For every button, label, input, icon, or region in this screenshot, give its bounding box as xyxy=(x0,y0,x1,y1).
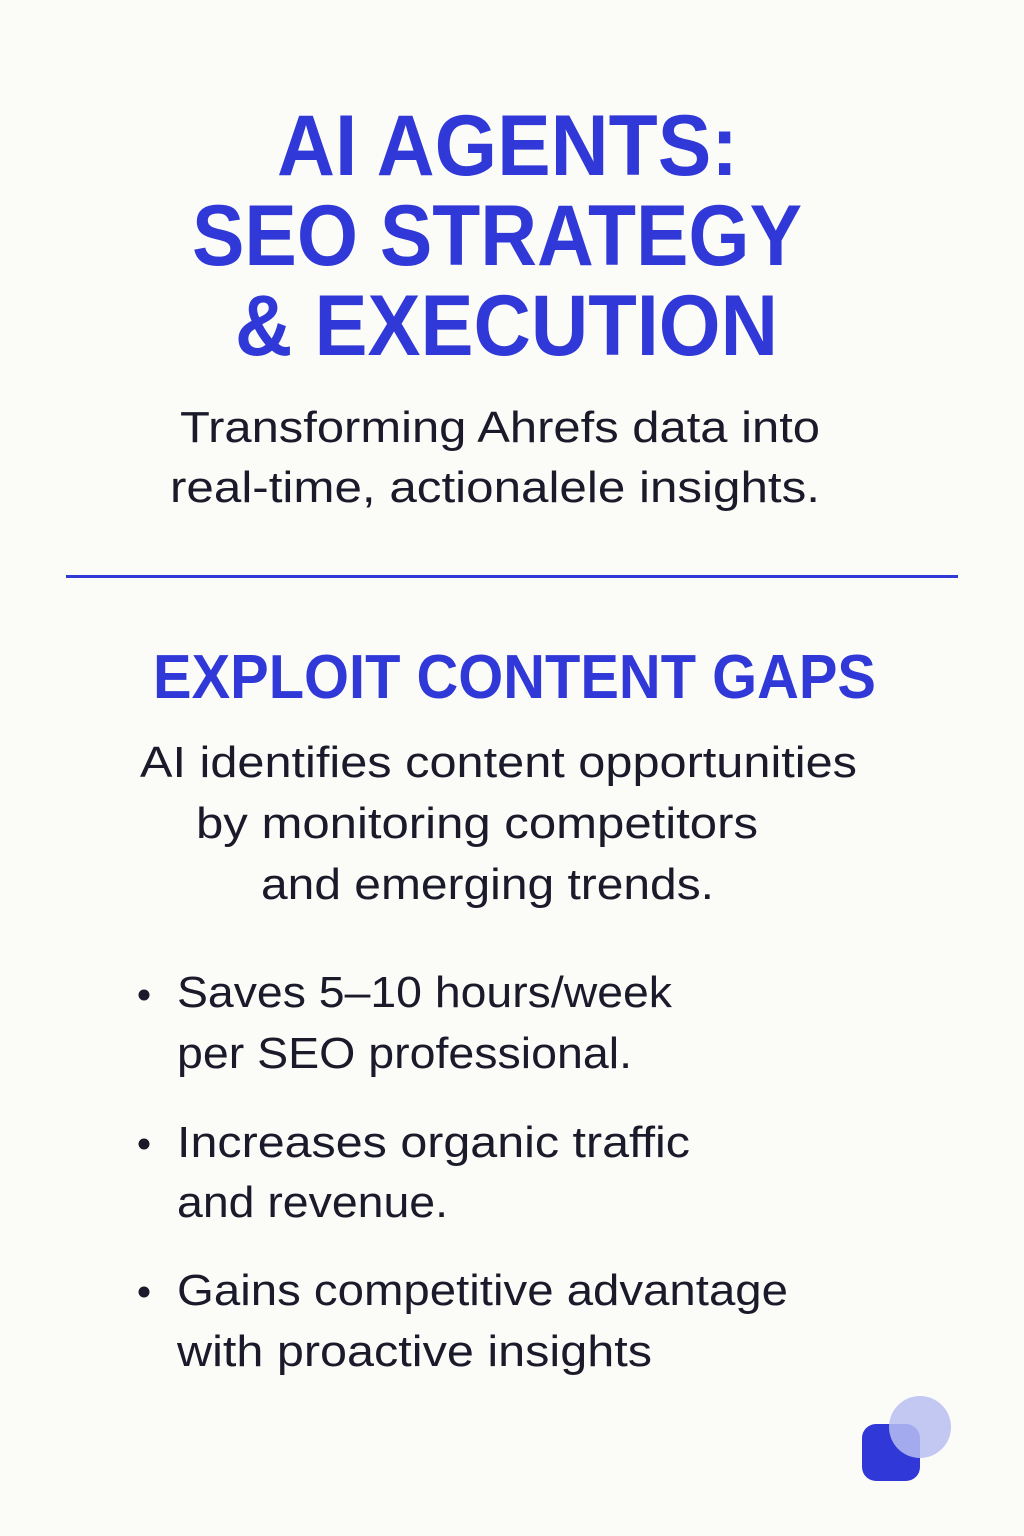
title xyxy=(192,98,802,374)
title: & EXECUTION xyxy=(235,278,778,374)
bullet list xyxy=(138,968,788,1376)
icon: logo xyxy=(862,1396,951,1481)
bullet 3 xyxy=(138,1266,788,1376)
subtitle: real-time, actionalele insights. xyxy=(170,463,820,512)
subtitle xyxy=(170,403,820,512)
subtitle: Transforming Ahrefs data into xyxy=(180,403,820,452)
bullet 1 xyxy=(138,968,673,1078)
title: AI AGENTS: xyxy=(277,98,738,194)
body paragraph: by monitoring competitors xyxy=(196,799,758,848)
title: SEO STRATEGY xyxy=(192,188,802,284)
body paragraph xyxy=(140,738,857,909)
bullet 2: Increases organic traffic xyxy=(177,1118,690,1167)
bullet 3: with proactive insights xyxy=(176,1327,652,1376)
bullet 2 xyxy=(138,1118,690,1227)
bullet 1: per SEO professional. xyxy=(177,1029,632,1078)
bullet 1: Saves 5–10 hours/week xyxy=(177,968,673,1017)
bullet 2: and revenue. xyxy=(177,1178,448,1227)
section heading: EXPLOIT CONTENT GAPS xyxy=(153,643,876,712)
body paragraph: AI identifies content opportunities xyxy=(140,738,857,787)
body paragraph: and emerging trends. xyxy=(261,860,714,909)
bullet 3: Gains competitive advantage xyxy=(177,1266,788,1315)
